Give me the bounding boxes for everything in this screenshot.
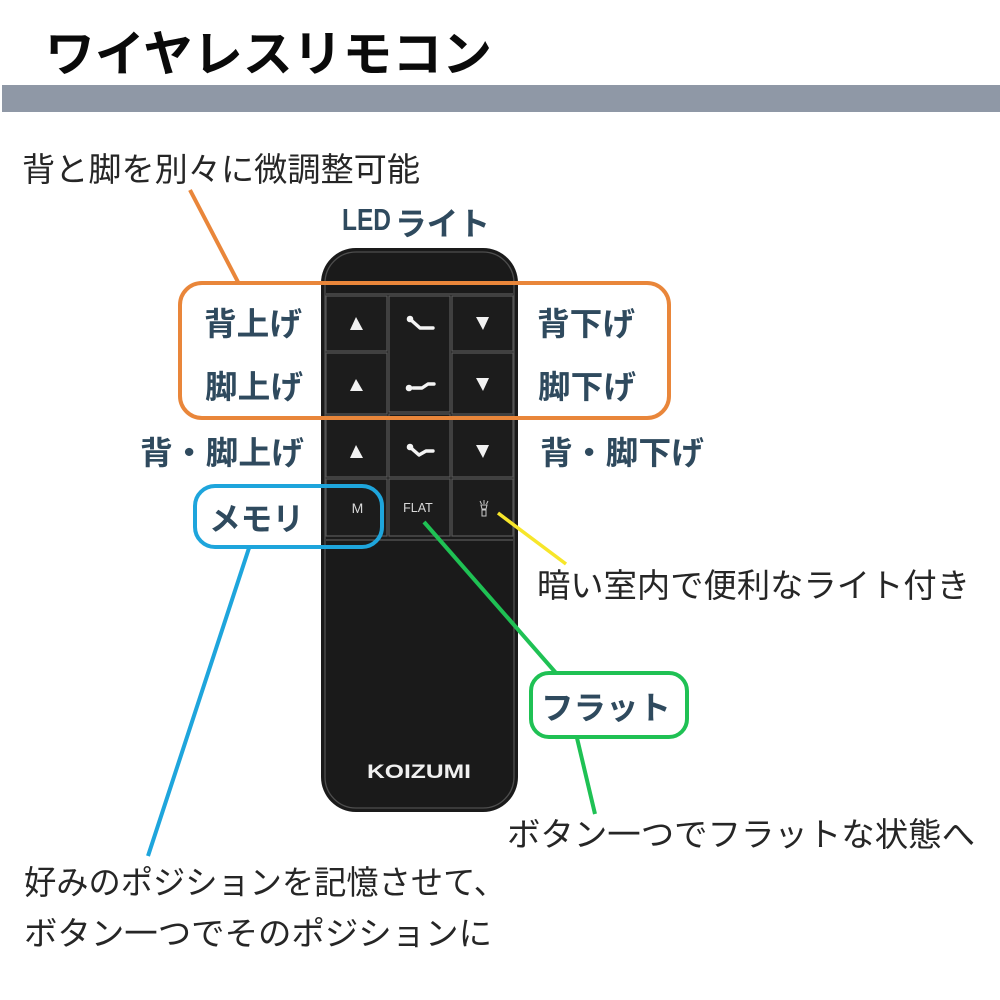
label: LED light: LED [342,202,391,237]
label: LED light: ライト [395,206,490,242]
label: back and leg down: 背・脚下げ [540,435,704,471]
label: back down: 背下げ [537,306,635,342]
header band [2,85,1000,112]
yellow leader line [498,513,566,564]
text: memory caption [24,864,506,952]
button grid [326,294,513,540]
label: memory: メモリ [209,501,304,537]
text: memory caption: ボタン一つでそのポジションに [24,915,492,952]
blue memory callout [148,486,382,856]
remote body [321,248,518,812]
button label: FLAT: FLAT [403,501,433,515]
remote control [321,248,518,812]
green flat callout [424,522,687,814]
text: flat caption: ボタン一つでフラットな状態へ [507,816,975,853]
button label: M: M [352,500,363,516]
icon: back and leg raise position [408,445,433,455]
remote bevel [325,252,514,808]
arrow icons: up [350,317,363,458]
icon: flashlight [480,500,488,516]
green leaders [424,522,687,814]
blue frame and leader [148,486,382,856]
label: back up: 背上げ [204,306,302,342]
label: back and leg up: 背・脚上げ [140,435,304,471]
label: leg down: 脚下げ [538,369,636,405]
orange callout frame [180,190,669,418]
title: ワイヤレスリモコン [45,28,492,82]
label: LED light [342,202,490,242]
brand logo: KOIZUMI: KOIZUMI [367,762,471,783]
text: back and leg adjustment caption: 背と脚を別々に微調整可能 [22,151,420,188]
text: memory caption: 好みのポジションを記憶させて、 [24,864,506,901]
label: leg up: 脚上げ [205,369,303,405]
arrow icons: down [476,317,489,458]
icon: leg raise position [407,384,434,390]
text: light caption: 暗い室内で便利なライト付き [537,567,970,604]
label: flat: フラット [541,690,671,726]
icon: back raise position [408,317,433,328]
